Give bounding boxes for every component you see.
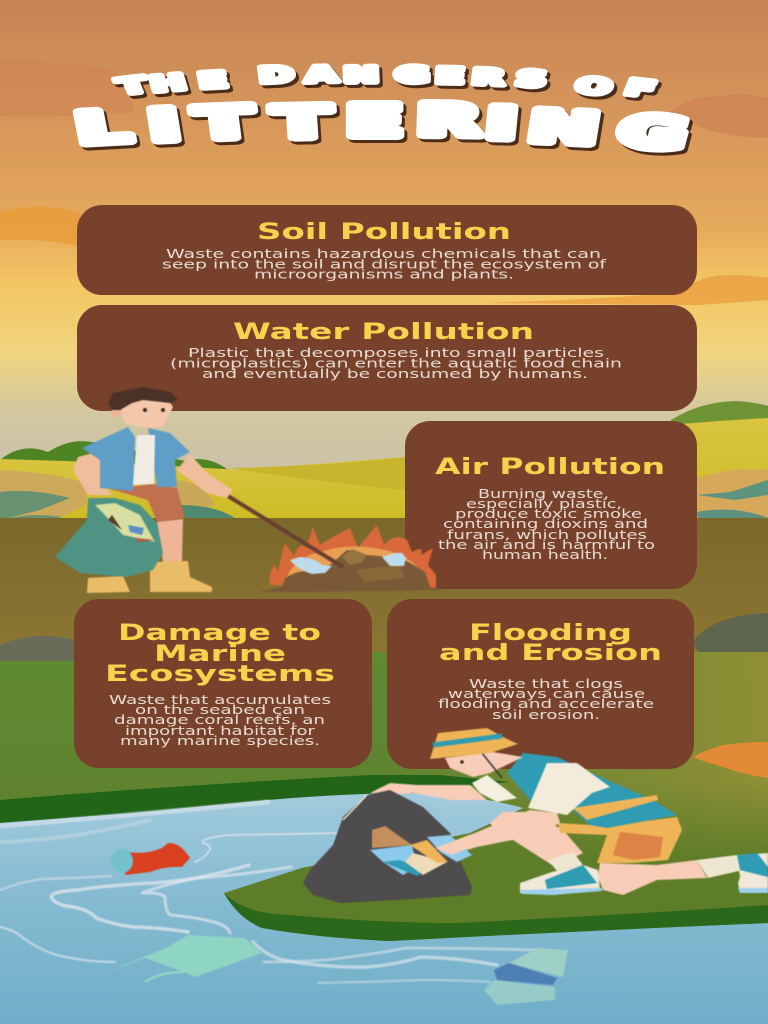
heading: flooding and erosion: Flooding [469,621,632,646]
title: the dangers of: THE DANGERS OF [114,61,659,102]
body: soil pollution: microorganisms and plants. [254,268,514,282]
leg [157,519,183,562]
boot [150,561,212,592]
heading: flooding and erosion [439,621,662,666]
collar sleeve [472,775,517,802]
rocks [0,613,768,661]
body: soil pollution [162,247,607,282]
grass bank [0,652,768,942]
body: marine: on the seabed can [135,703,305,717]
face [445,752,523,777]
floating plastic bottle [484,948,568,1005]
body: air pollution: especially plastic, [466,497,622,511]
floating face mask [107,935,262,982]
heading: damage to marine ecosystems: Damage to [118,621,321,646]
arm holding bottle [440,810,560,855]
head [120,395,173,428]
body: flooding [438,677,654,722]
back sock [697,855,743,878]
river [0,793,768,1024]
body: marine: many marine species. [120,734,320,748]
body: marine [109,693,331,748]
green bag [55,498,163,577]
front knee and calf [490,812,583,867]
heading: soil pollution: Soil Pollution [257,220,511,245]
front sock [548,852,583,871]
heading: water pollution: Water Pollution [233,320,534,345]
shorts [558,817,682,863]
body: water pollution: (microplastics) can enter the aquatic food chain [170,357,622,371]
card: flooding and erosion [387,599,694,769]
arm reaching bag [370,783,487,800]
boy character [55,387,343,593]
arms [73,453,113,495]
body: air pollution: the air and is harmful to [438,538,655,552]
card: damage to marine ecosystems [74,599,372,768]
stick [228,496,343,567]
body: water pollution: Plastic that decomposes into small particles [188,346,604,360]
background sky [0,0,768,470]
body: flooding: Waste that clogs [469,677,623,691]
card: water pollution [77,305,697,411]
vest stripe [573,795,658,820]
card: air pollution [405,421,697,589]
body: marine: important habitat for [125,724,315,738]
body: marine: damage coral reefs, an [114,713,325,727]
card: soil pollution [77,205,697,295]
body: flooding: soil erosion. [492,708,600,722]
body: air pollution: furans, which pollutes [447,528,647,542]
island shadow edge [224,893,768,941]
shirt [82,427,135,491]
black garbage bag [303,790,475,903]
chin strap [482,753,502,778]
body: air pollution [438,487,655,562]
body: air pollution: produce toxic smoke [455,507,642,521]
heading: flooding and erosion: and Erosion [439,641,662,666]
heading: air pollution: Air Pollution [435,455,665,480]
floating red can [111,843,190,875]
body: water pollution: and eventually be consumed by humans. [202,367,588,381]
shorts [110,484,185,522]
body: water pollution [170,346,622,381]
orange pond [693,742,768,778]
heading: damage to marine ecosystems [105,621,335,687]
pocket [613,832,663,860]
back shoe [737,853,768,892]
body: air pollution: Burning waste, [478,487,609,501]
ground [0,518,768,654]
title: littering: LITTERING [71,94,693,160]
body: flooding: waterways can cause [448,687,645,701]
body: marine: Waste that accumulates [109,693,331,707]
back thigh [598,860,707,895]
body: air pollution: containing dioxins and [443,517,648,531]
body: air pollution: human health. [482,548,608,562]
crouching man character [370,728,768,895]
front shoe [520,865,600,895]
left shoe [87,576,130,593]
body: flooding: flooding and accelerate [438,697,654,711]
fire and rubbish pile [258,525,442,592]
heading: damage to marine ecosystems: Marine [154,642,286,667]
heading: damage to marine ecosystems: Ecosystems [105,662,335,687]
body: soil pollution: Waste contains hazardous chemicals that can [166,247,601,261]
distant hills and fields [0,401,768,532]
body: soil pollution: seep into the soil and disrupt the ecosystem of [162,258,607,272]
sleeve [528,763,610,815]
vest [507,753,677,828]
hat [430,728,518,759]
